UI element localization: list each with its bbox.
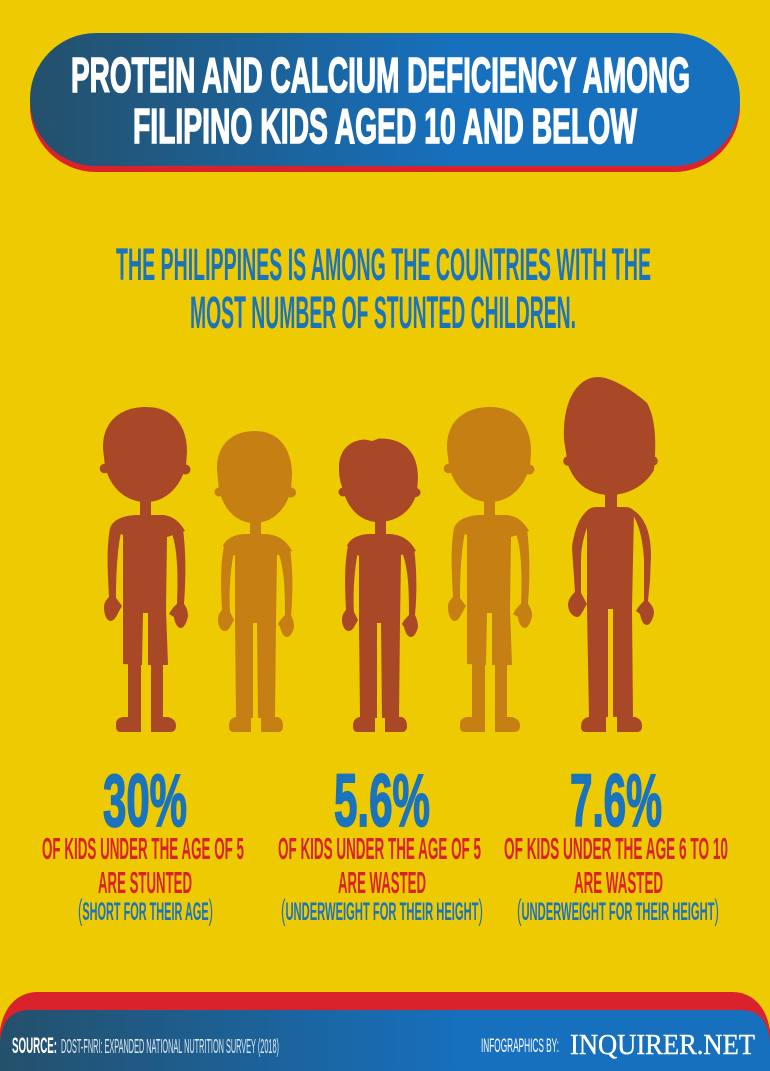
title banner (30, 33, 740, 172)
footer band (0, 992, 770, 1071)
child 4 silhouette (444, 407, 534, 732)
child 2 silhouette (214, 431, 296, 732)
child 5 silhouette (563, 377, 658, 732)
title (71, 49, 690, 154)
text: OF KIDS UNDER THE AGE OF 5 (278, 831, 481, 866)
child 1 silhouette (100, 407, 190, 732)
text: OF KIDS UNDER THE AGE OF 5 (42, 831, 244, 866)
stat: 30% stunted (42, 759, 244, 927)
infographics credit: INFOGRAPHICS BY: (481, 1036, 559, 1057)
figures of children (100, 377, 658, 732)
infographics credit (481, 1029, 755, 1061)
stat: 30% stunted: (SHORT FOR THEIR AGE) (78, 894, 213, 927)
text: (UNDERWEIGHT FOR THEIR HEIGHT) (281, 894, 483, 927)
footer band: DOST-FNRI: EXPANDED NATIONAL NUTRITION SURVEY (2018) (61, 1036, 279, 1058)
stat: 7.6% wasted: 7.6% (570, 759, 662, 842)
subheading (116, 239, 651, 338)
stat: 30% stunted: 30% (103, 759, 187, 842)
stat: 5.6% wasted: 5.6% (334, 759, 430, 842)
source credit: SOURCE: (12, 1033, 57, 1058)
stat: 30% stunted: ARE STUNTED (98, 865, 192, 900)
source credit (12, 1033, 279, 1058)
stat: 7.6% wasted (504, 759, 728, 927)
child 3 silhouette (338, 438, 420, 732)
stat: 5.6% wasted: ARE WASTED (338, 865, 426, 900)
infographics credit: INQUIRER.NET (570, 1029, 755, 1061)
stat: 5.6% wasted (278, 759, 483, 927)
